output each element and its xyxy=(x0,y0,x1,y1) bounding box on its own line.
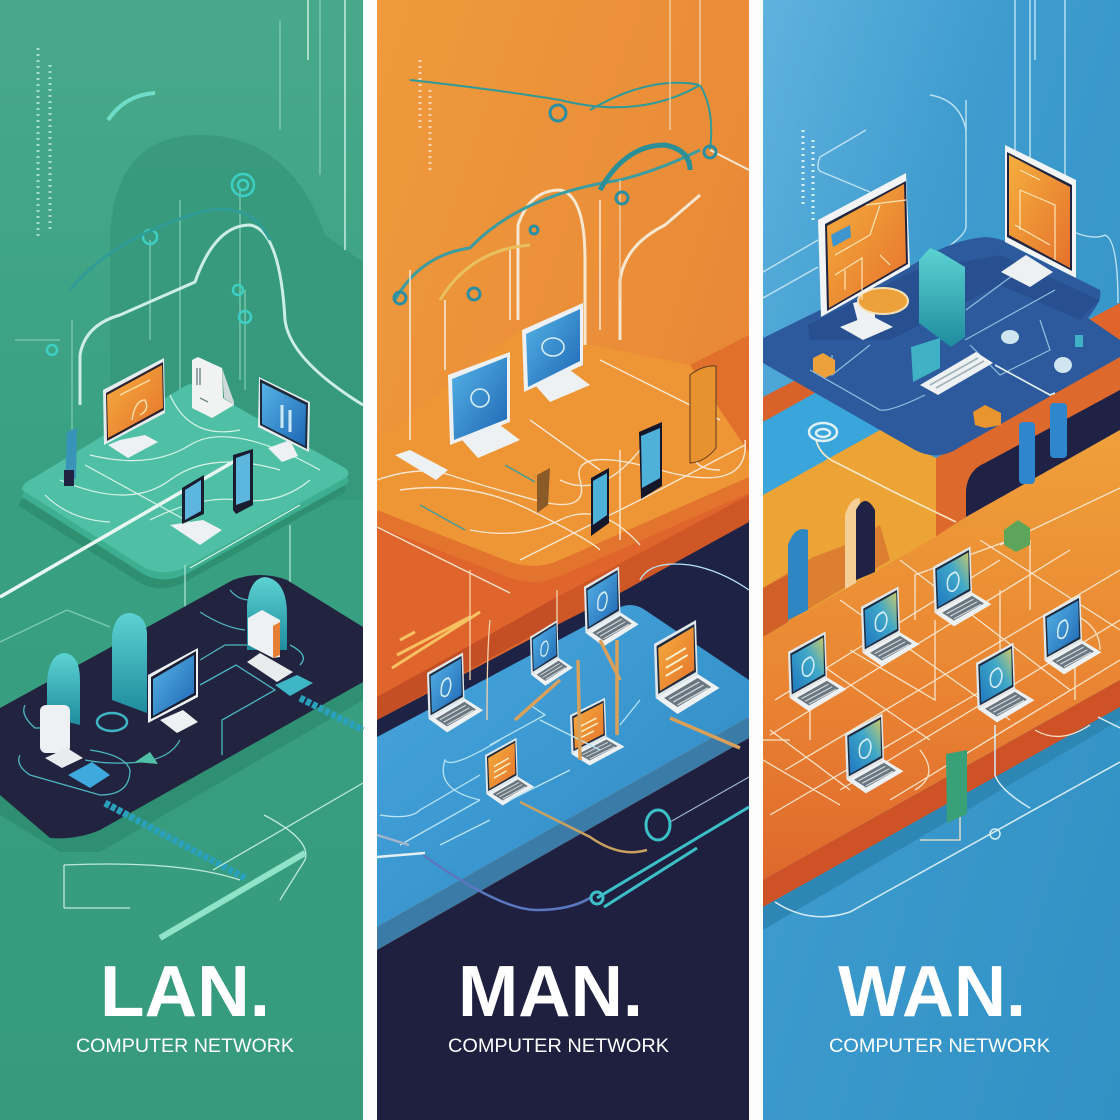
monitor left xyxy=(448,352,520,458)
green cylinder xyxy=(946,750,967,823)
wifi icon xyxy=(809,423,837,441)
platform surface xyxy=(377,330,749,566)
dark platform traces xyxy=(19,590,303,795)
small cylinders xyxy=(1019,403,1067,484)
light blue strip xyxy=(763,393,880,495)
laptops xyxy=(788,546,1102,793)
dark platform xyxy=(0,575,363,838)
navy lower xyxy=(377,738,749,1120)
wifi link wire xyxy=(816,440,956,522)
monitor right xyxy=(1001,145,1076,287)
top decorative wires xyxy=(0,0,320,642)
subtitle: LAN: COMPUTER NETWORK xyxy=(76,1036,294,1057)
server cylinders xyxy=(47,577,287,731)
table devices xyxy=(813,330,1083,428)
table shadow xyxy=(808,255,1100,340)
router stack xyxy=(247,610,313,696)
phones xyxy=(170,449,253,545)
rear darker patch xyxy=(690,335,749,453)
vertical link lines xyxy=(470,570,557,720)
phones xyxy=(537,422,662,536)
blue floor xyxy=(377,605,749,927)
large white cable xyxy=(80,225,363,405)
orange wall xyxy=(377,477,749,720)
arches cables xyxy=(395,0,749,440)
dashed data links xyxy=(105,698,363,878)
lower blue cables xyxy=(775,717,1120,917)
side data ticks xyxy=(803,130,813,220)
blue floor traces xyxy=(380,564,749,845)
yellow wall xyxy=(763,430,936,637)
side data ticks xyxy=(38,48,50,240)
navy opening xyxy=(966,390,1120,517)
side data ticks xyxy=(420,60,430,170)
blue floor edge xyxy=(377,717,749,950)
top wires xyxy=(763,0,1118,303)
pedestal wall xyxy=(936,357,1120,537)
tan pillars on blue floor xyxy=(515,640,740,760)
monitor left xyxy=(818,173,910,340)
red strip left xyxy=(763,380,815,422)
monitor: blue xyxy=(258,377,310,462)
teal cylinder xyxy=(919,248,965,347)
title: WAN: WAN. xyxy=(838,952,1026,1032)
white box device xyxy=(40,705,158,788)
rear orange wedge xyxy=(1088,303,1120,340)
laptops xyxy=(427,566,720,805)
orange circuit deck xyxy=(763,430,1120,880)
panel: MAN xyxy=(377,0,749,1120)
monitor: dark platform xyxy=(148,648,198,733)
platform lip xyxy=(377,346,749,582)
teal platform edge xyxy=(22,393,348,579)
deck front band xyxy=(763,680,1120,907)
orange streaks xyxy=(392,612,480,668)
monitor: orange xyxy=(103,358,165,458)
handheld device xyxy=(64,428,77,486)
table traces xyxy=(810,270,1055,410)
panel: LAN xyxy=(0,0,363,1120)
circuit traces xyxy=(763,488,1120,840)
icons: round connectors xyxy=(394,105,716,304)
navy tabletop xyxy=(763,237,1120,455)
arch doors xyxy=(788,498,875,620)
keyboard left xyxy=(395,450,448,480)
wall lower shade xyxy=(763,525,890,637)
subtitle: WAN: COMPUTER NETWORK xyxy=(829,1036,1050,1057)
title: MAN: MAN. xyxy=(458,952,643,1032)
router tall xyxy=(690,366,716,463)
bottom cables xyxy=(64,783,363,938)
teal platform shadow xyxy=(19,402,346,588)
navy wedge xyxy=(377,522,749,760)
platform circuit traces xyxy=(377,360,745,593)
router: white xyxy=(192,357,234,418)
floor shadow xyxy=(763,707,1120,930)
platform circuit traces xyxy=(45,395,320,568)
subtitle: MAN: COMPUTER NETWORK xyxy=(448,1036,669,1057)
dark platform shadow xyxy=(0,600,363,852)
monitor right xyxy=(522,303,590,402)
panel: WAN xyxy=(763,0,1120,1120)
title: LAN: LAN. xyxy=(100,952,270,1032)
arch backdrop xyxy=(110,135,363,500)
lower cables xyxy=(377,777,749,910)
icon: wifi arcs xyxy=(47,93,254,355)
cube xyxy=(1004,520,1030,552)
wall dark bands xyxy=(557,495,749,627)
white diagonal cable xyxy=(0,455,245,597)
teal platform xyxy=(22,384,348,572)
vertical link lines xyxy=(185,525,290,720)
